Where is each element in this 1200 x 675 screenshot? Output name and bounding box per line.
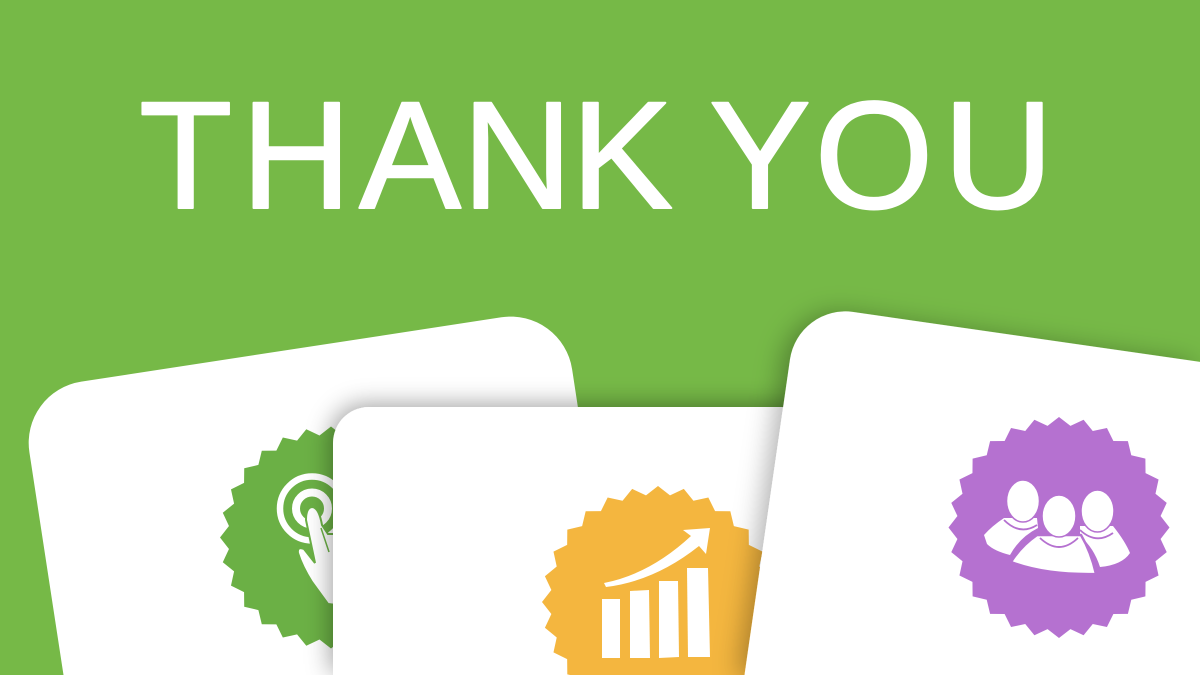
touch rings — [280, 476, 344, 540]
person right — [1080, 490, 1130, 567]
card body — [29, 317, 619, 675]
hand — [298, 507, 345, 606]
title: THANK YOU — [0, 70, 1054, 241]
icon: green badge with touch hand — [220, 426, 442, 648]
bar chart — [602, 568, 710, 658]
card body — [744, 311, 1200, 675]
green starburst — [220, 426, 442, 648]
finger crease — [321, 528, 329, 552]
icon: purple badge with people — [948, 417, 1170, 638]
card body — [333, 407, 820, 675]
arrow — [604, 528, 710, 587]
panel: left card — [29, 317, 619, 675]
yellow starburst — [542, 486, 774, 675]
panel: centre card — [333, 407, 820, 675]
person centre — [1011, 495, 1096, 574]
icon: yellow badge with growth chart — [542, 486, 774, 675]
people group — [984, 480, 1130, 574]
person left — [984, 480, 1040, 555]
panel: right card — [744, 311, 1200, 675]
purple starburst — [948, 417, 1170, 638]
